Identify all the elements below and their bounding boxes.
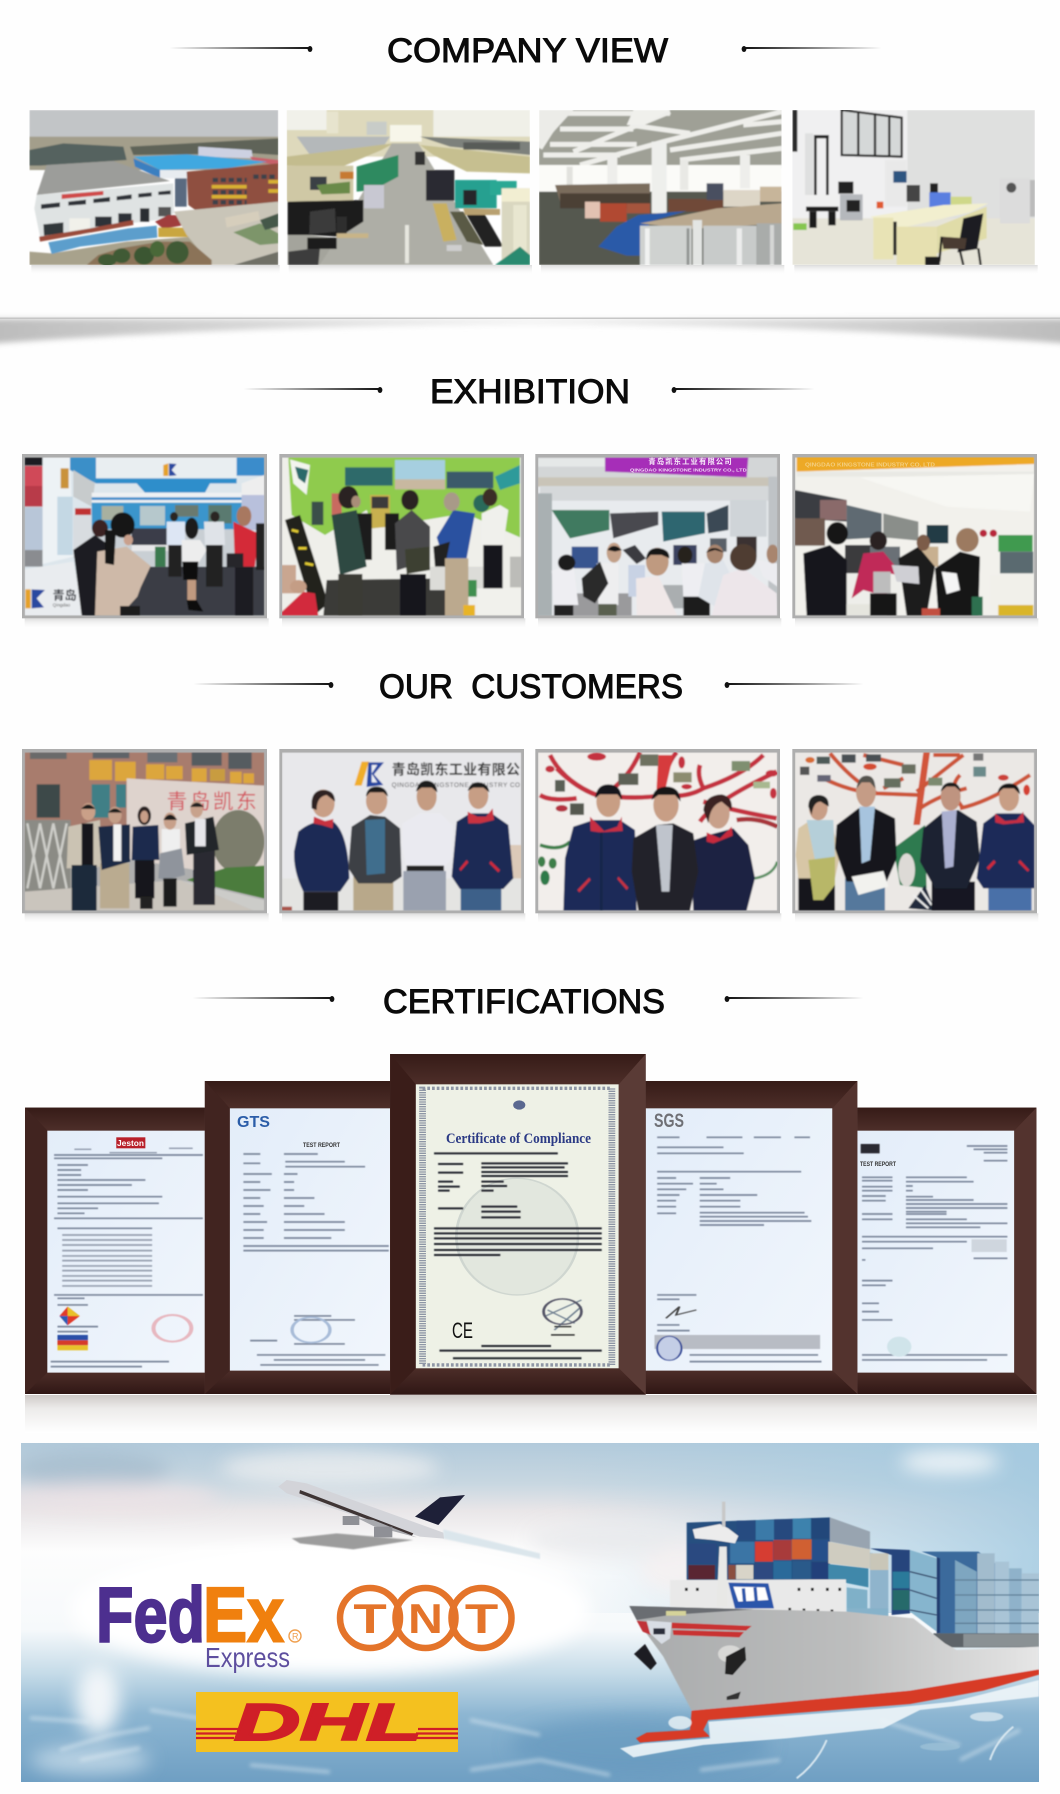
photo: blue exhibition booth: 青岛 — [53, 587, 77, 602]
panel: shipping banner — [0, 1443, 1039, 1782]
heading: company view: COMPANY VIEW — [387, 32, 668, 70]
logo: TNT: T — [353, 1596, 387, 1642]
photo: warehouse — [539, 110, 782, 265]
heading: exhibition: EXHIBITION — [430, 373, 630, 411]
heading: our customers: OUR CUSTOMERS — [379, 668, 683, 706]
photo: green booth visitors — [282, 457, 521, 616]
certificate frame: left material safety sheet — [25, 1108, 205, 1394]
photo: visitors at company gate — [25, 752, 264, 911]
certificate texts: SGS — [654, 1111, 684, 1132]
panel: framed certificates — [25, 1054, 1037, 1433]
photo: blue exhibition booth — [25, 457, 264, 616]
photo: visitors at company gate: 青岛凯东 — [167, 790, 257, 813]
panel: exhibition photos left — [22, 454, 525, 629]
photo: staff under company logo — [282, 752, 521, 911]
certificate texts: TEST REPORT — [303, 1143, 340, 1149]
heading: exhibition — [243, 373, 815, 411]
photo: three people before red tree mural — [538, 752, 778, 911]
sky clouds and sea — [0, 1450, 1000, 1775]
sign lettering — [630, 457, 935, 474]
certificate texts: GTS — [237, 1114, 270, 1131]
sea highlights — [30, 1710, 1020, 1775]
logo: TNT: N — [408, 1595, 443, 1642]
photo: four people before orange tree mural — [795, 752, 1034, 911]
heading: certifications — [192, 983, 864, 1021]
panel: exhibition photos right — [535, 454, 1038, 629]
certificate texts: TEST REPORT — [860, 1162, 896, 1168]
certificate frame: SGS test report — [646, 1081, 857, 1394]
sign lettering: QINGDAO KINGSTONE INDUSTRY CO., LTD — [630, 468, 747, 474]
sign lettering: 青岛凯东工业有限公司 — [648, 457, 732, 466]
certificate texts: Certificate of Compliance — [446, 1131, 592, 1147]
panel: company view photos left — [29, 110, 532, 275]
photo: factory aerial view — [29, 110, 278, 266]
icon: airplane — [278, 1480, 540, 1559]
divider band — [0, 318, 1060, 343]
certificate texts — [117, 1111, 896, 1343]
logo: FedEx Express: Fed — [96, 1570, 205, 1658]
sign lettering: QINGDAO KINGSTONE INDUSTRY CO. LTD — [805, 463, 935, 469]
logo: FedEx Express: Express — [205, 1642, 290, 1673]
photo: workshop hall — [287, 110, 530, 265]
photo: staff under company logo: 青岛凯东工业有限公 — [392, 761, 520, 777]
heading: company view — [169, 32, 882, 70]
illustration: container ship — [620, 1502, 1039, 1778]
logo: DHL: DHL — [234, 1694, 422, 1752]
heading: certifications: CERTIFICATIONS — [383, 983, 665, 1021]
logo: TNT — [340, 1588, 512, 1648]
certificate frame: GTS test report — [205, 1081, 390, 1394]
logo: FedEx Express: R — [292, 1632, 299, 1642]
photo: blue exhibition booth: Qingdao — [53, 603, 71, 608]
certificate texts: Jeston — [117, 1139, 144, 1148]
photo: testing room — [792, 110, 1035, 265]
panel: company view photos right — [539, 110, 1038, 275]
logo: TNT: T — [465, 1596, 498, 1642]
panel: customer photos right — [535, 749, 1038, 924]
photo: staff under company logo: QINGDAO KINGSTONE INDUSTRY CO — [392, 782, 520, 789]
photo: purple sign booth — [538, 457, 779, 616]
certificate frame: centre certificate of compliance — [390, 1054, 646, 1395]
heading: our customers — [193, 668, 864, 706]
photo: orange sign booth — [795, 457, 1034, 616]
certificate texts: CE — [452, 1318, 473, 1343]
logo: FedEx Express — [96, 1570, 301, 1673]
panel: customer photos left — [22, 749, 525, 924]
logo: DHL — [196, 1692, 458, 1752]
logo: FedEx Express: Ex — [203, 1570, 284, 1658]
certificate frame: right test report — [857, 1108, 1036, 1394]
